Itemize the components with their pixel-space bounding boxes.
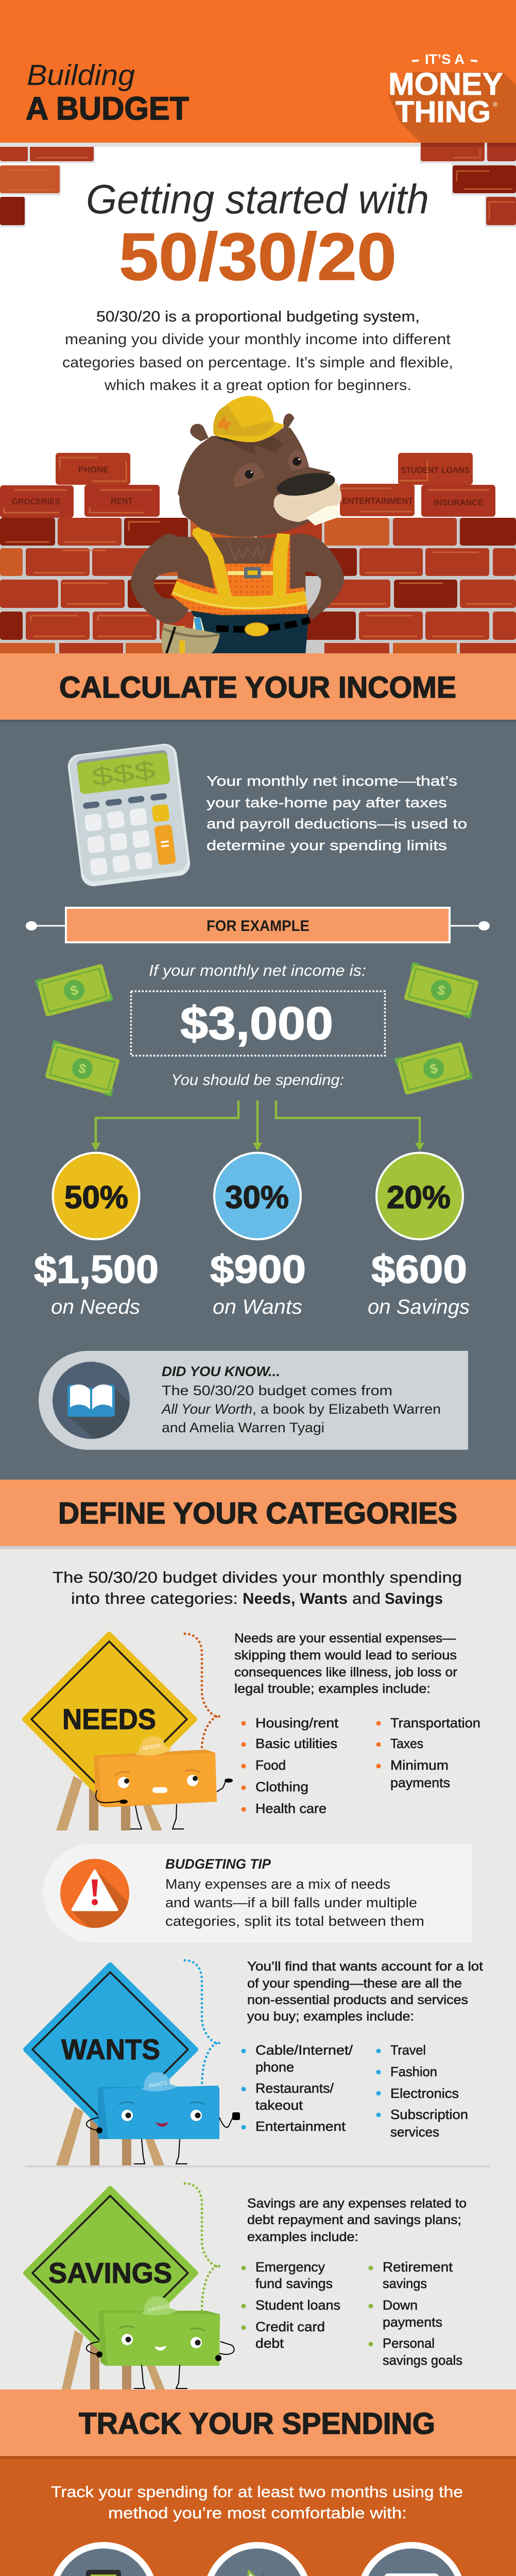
icon: warning triangle [60, 1859, 129, 1928]
text: did you know: and Amelia Warren Tyagi [162, 1420, 324, 1435]
arrows to percentages [91, 1100, 424, 1151]
savings brick character [87, 2296, 234, 2388]
intro paragraph: 50/30/20 is a proportional budgeting system, [96, 309, 420, 325]
list: needs examples: Housing/rent [255, 1715, 339, 1731]
dotted brace [185, 1960, 221, 2087]
intro paragraph: meaning you divide your monthly income into different [65, 331, 451, 348]
series title: Building [27, 59, 135, 92]
labelled bricks: ENTERTAINMENT [342, 496, 414, 506]
list: needs examples: Minimum [390, 1757, 449, 1773]
beaver arms and torso [131, 533, 344, 623]
list: needs examples: Transportation [390, 1715, 480, 1731]
text: net income definition: determine your spending limits [207, 838, 447, 853]
needs brick character [94, 1736, 233, 1829]
list: wants examples: takeout [255, 2097, 303, 2113]
text: savings definition: Savings are any expenses related to [247, 2196, 467, 2211]
wants share: 30%: on Wants [213, 1296, 302, 1318]
list: wants examples [241, 2042, 468, 2140]
income amount box [131, 991, 385, 1056]
sign: wants: WANTS [61, 2033, 160, 2065]
header band [0, 0, 516, 147]
text: wants definition: You’ll find that wants account for a lot [247, 1959, 483, 1974]
text: categories intro: and [352, 1589, 381, 1607]
list: savings examples: debt [255, 2335, 284, 2351]
banner: define your categories [0, 1480, 516, 1549]
text: needs definition: legal trouble; examples include: [234, 1682, 431, 1696]
text: tip: categories, split its total between them [165, 1913, 424, 1929]
list: wants examples: Entertainment [255, 2119, 346, 2134]
text: wants definition: non-essential products and services [247, 1993, 468, 2007]
savings share: 20%: on Savings [368, 1296, 470, 1318]
needs share: 50% [34, 1153, 159, 1318]
beaver ears [190, 414, 295, 442]
icon: calculator: $$$ [90, 756, 157, 791]
logo: It's a Money Thing [388, 52, 516, 143]
beaver trousers and belt [191, 609, 310, 653]
text: monthly net income prompt: If your monthly net income is: [149, 961, 366, 979]
for example label [26, 908, 490, 942]
list: needs examples: Basic utilities [255, 1736, 337, 1751]
text: wants definition [247, 1959, 483, 2024]
list: savings examples: savings goals [383, 2352, 462, 2368]
income amount box: $3,000 [180, 998, 333, 1049]
top corner bricks [0, 139, 516, 227]
logo: It's a Money Thing: ® [493, 100, 498, 108]
list: needs examples: Food [255, 1757, 286, 1773]
sign: wants [26, 1960, 240, 2165]
list: wants examples: phone [255, 2059, 294, 2075]
text: did you know [161, 1364, 441, 1435]
logo: It's a Money Thing: THING [395, 95, 491, 129]
text: tracking intro: method you’re most comfortable with: [108, 2504, 407, 2522]
main title [86, 176, 429, 294]
sign: savings: SAVINGS [48, 2257, 172, 2289]
list: wants examples: Restaurants/ [255, 2080, 334, 2096]
wants brick character: WANTS [149, 2080, 168, 2089]
list: wants examples: Subscription [390, 2107, 468, 2122]
intro paragraph: which makes it a great option for beginners. [104, 377, 411, 394]
list: savings examples: Down [383, 2297, 418, 2313]
list: savings examples: Personal [383, 2335, 435, 2351]
logo: It's a Money Thing: IT’S A [425, 52, 465, 67]
icon: dollar bill top right [404, 963, 479, 1017]
text: needs definition: Needs are your essential expenses— [234, 1631, 456, 1646]
main title: Getting started with [86, 176, 429, 222]
text: did you know: All Your Worth [161, 1401, 252, 1417]
logo: It's a Money Thing: MONEY [388, 66, 503, 101]
for example label: FOR EXAMPLE [207, 918, 309, 935]
intro paragraph: categories based on percentage. It’s simple and flexible, [62, 354, 453, 371]
beaver mascot [131, 396, 344, 653]
labelled bricks: PHONE [78, 465, 109, 474]
banner: calculate your income [0, 653, 516, 720]
series title [26, 59, 189, 127]
list: needs examples [241, 1715, 480, 1816]
wants brick character [87, 2072, 240, 2164]
icon: calculator: = [160, 835, 170, 853]
text: needs definition: consequences like illness, job loss or [234, 1665, 457, 1680]
sign: savings [26, 2183, 234, 2389]
method: apps [54, 2542, 154, 2576]
icon: dollar bill bottom left: $ [77, 1060, 88, 1077]
beaver hard hat [211, 396, 285, 442]
brick wall [0, 518, 516, 653]
callout: did you know [39, 1351, 468, 1450]
wants share: 30%: 30% [225, 1180, 289, 1215]
icon: calculator [66, 742, 192, 888]
needs share: 50%: on Needs [51, 1296, 140, 1318]
icon: dollar bill bottom left [45, 1042, 120, 1095]
text: categories intro: into three categories: [71, 1589, 238, 1607]
list: needs examples: payments [390, 1775, 450, 1790]
banner: calculate your income: CALCULATE YOUR INCOME [59, 671, 456, 704]
intro paragraph [62, 309, 453, 394]
beaver head [178, 428, 331, 537]
icon: dollar bill top left: $ [68, 982, 80, 998]
list: needs examples: Health care [255, 1801, 326, 1816]
savings share: 20% [368, 1153, 470, 1318]
list: needs examples: Taxes [390, 1736, 423, 1751]
text: net income definition: Your monthly net income—that’s [207, 773, 457, 789]
list: savings examples: Retirement [383, 2259, 453, 2275]
dotted brace [185, 2183, 221, 2311]
needs share: 50%: $1,500 [34, 1248, 159, 1292]
text: categories intro: The 50/30/20 budget divides your monthly spending [53, 1568, 462, 1586]
text: tip: Many expenses are a mix of needs [165, 1876, 390, 1892]
labelled bricks: STUDENT LOANS [401, 465, 470, 475]
text: net income definition: your take-home pay after taxes [207, 795, 447, 810]
text: did you know: The 50/30/20 budget comes from [162, 1383, 392, 1398]
callout: needs budgeting tip [43, 1844, 472, 1942]
beaver face [230, 436, 341, 526]
text: you should be spending: You should be spending: [171, 1072, 344, 1089]
list: wants examples: services [390, 2124, 439, 2140]
labelled bricks: INSURANCE [434, 498, 484, 507]
list: wants examples: Fashion [390, 2064, 437, 2079]
list: needs examples: Clothing [255, 1779, 308, 1794]
text: needs definition [234, 1631, 457, 1696]
text: tip: and wants—if a bill falls under multiple [165, 1895, 417, 1910]
labelled bricks: RENT [111, 496, 133, 506]
text: savings definition [247, 2196, 467, 2244]
text: categories intro: Savings [385, 1589, 443, 1607]
text: wants definition: you buy; examples include: [247, 2009, 414, 2024]
labelled bricks [0, 453, 495, 518]
icon: dollar bill bottom right [396, 1042, 471, 1095]
banner: define your categories: DEFINE YOUR CATEGORIES [58, 1497, 457, 1530]
beaver tool pouch [162, 617, 220, 653]
text: needs definition: skipping them would lead to serious [234, 1648, 457, 1663]
text: net income definition: and payroll deductions—is used to [207, 816, 467, 832]
text: tracking intro [51, 2483, 463, 2522]
list: savings examples: payments [383, 2314, 442, 2330]
method: spreadsheets [362, 2542, 462, 2576]
icon: open book [53, 1362, 130, 1439]
labelled bricks: GROCERIES [12, 497, 60, 506]
main title: 50/30/20 [119, 219, 397, 294]
wants share: 30% [210, 1153, 306, 1318]
dotted brace [185, 1634, 221, 1749]
text: wants definition: of your spending—these are all the [247, 1976, 462, 1991]
list: savings examples [241, 2259, 462, 2368]
text: tracking intro: Track your spending for at least two months using the [51, 2483, 463, 2501]
icon: budget spreadsheet [384, 2573, 439, 2576]
sign: needs: NEEDS [62, 1703, 156, 1735]
text: categories intro [53, 1568, 462, 1607]
text: savings definition: examples include: [247, 2230, 358, 2244]
list: savings examples: fund savings [255, 2276, 333, 2291]
icon: dollar bill top right: $ [436, 982, 447, 998]
text: did you know: DID YOU KNOW... [162, 1364, 280, 1379]
text: categories intro: Needs, Wants [243, 1589, 348, 1607]
list: savings examples: savings [383, 2276, 427, 2291]
savings share: 20%: $600 [371, 1248, 467, 1292]
text: savings definition: debt repayment and savings plans; [247, 2213, 461, 2227]
text: net income definition [207, 773, 467, 853]
banner: track your spending: TRACK YOUR SPENDING [79, 2407, 435, 2441]
savings share: 20%: 20% [387, 1180, 451, 1215]
list: wants examples: Cable/Internet/ [255, 2042, 353, 2058]
icon: dollar bill top left [37, 963, 112, 1017]
panel: calculate your income [0, 720, 516, 1480]
text: did you know: , a book by Elizabeth Warren [252, 1401, 441, 1417]
list: savings examples: Credit card [255, 2319, 325, 2334]
list: savings examples: Student loans [255, 2297, 340, 2313]
wants share: 30%: $900 [210, 1248, 306, 1292]
sign: needs [25, 1634, 233, 1831]
needs share: 50%: 50% [64, 1180, 128, 1215]
panel: track your spending [0, 2389, 516, 2576]
needs brick character: NEEDS [143, 1743, 161, 1752]
icon: cursor [247, 2571, 277, 2576]
method: online banking [207, 2542, 308, 2576]
icon: dollar bill bottom right: $ [428, 1060, 439, 1077]
list: wants examples: Electronics [390, 2086, 459, 2101]
panel: define your categories [0, 1480, 516, 2389]
series title: A BUDGET [26, 91, 189, 127]
list: savings examples: Emergency [255, 2259, 325, 2275]
icon: phone [86, 2570, 121, 2576]
text: tip: BUDGETING TIP [165, 1856, 271, 1872]
text: tip [165, 1856, 424, 1929]
beaver safety vest [171, 527, 308, 615]
banner: track your spending [0, 2389, 516, 2459]
list: wants examples: Travel [390, 2042, 426, 2058]
savings brick character: SAVINGS [148, 2303, 171, 2313]
